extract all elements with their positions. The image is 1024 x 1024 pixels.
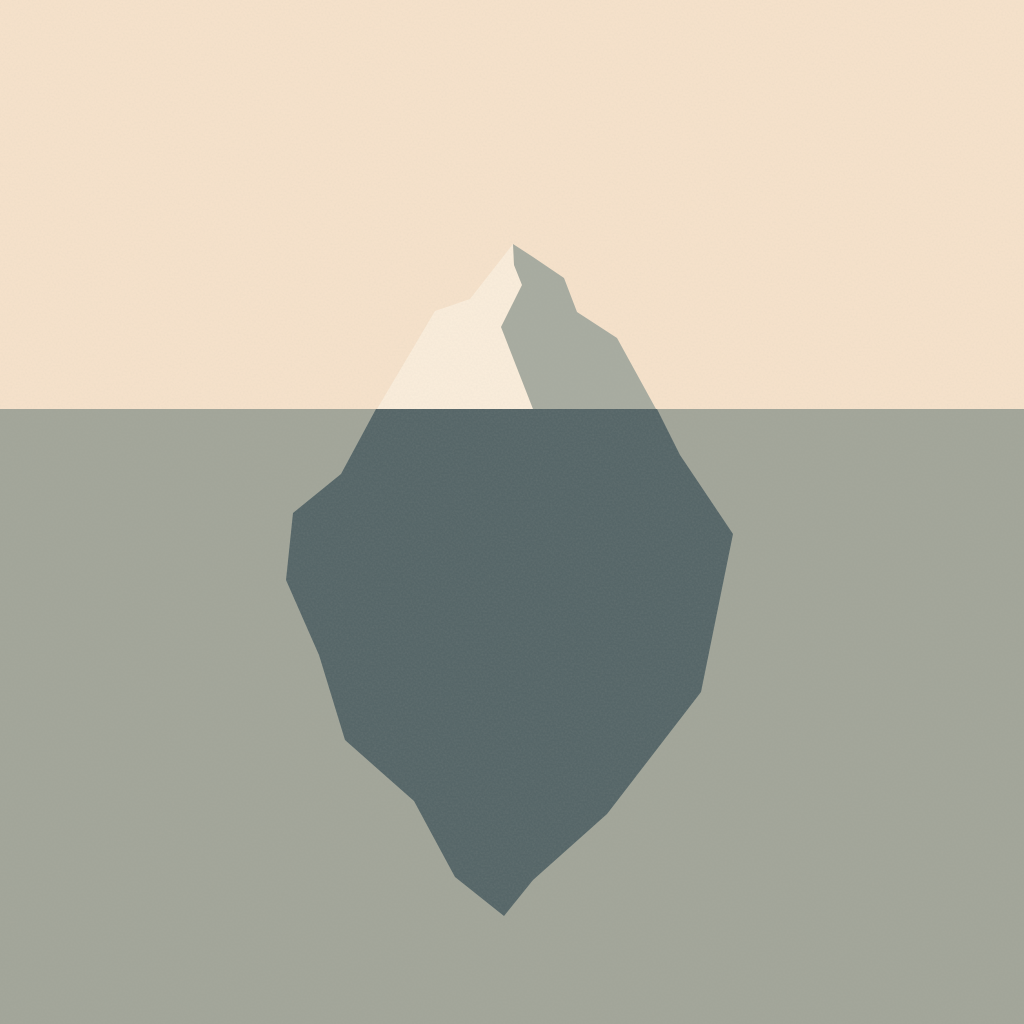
iceberg underwater mass [286,409,733,916]
sky background [0,0,1024,409]
sea background [0,409,1024,1024]
iceberg tip: shadow face [501,244,656,409]
iceberg tip: lit face [377,244,533,409]
